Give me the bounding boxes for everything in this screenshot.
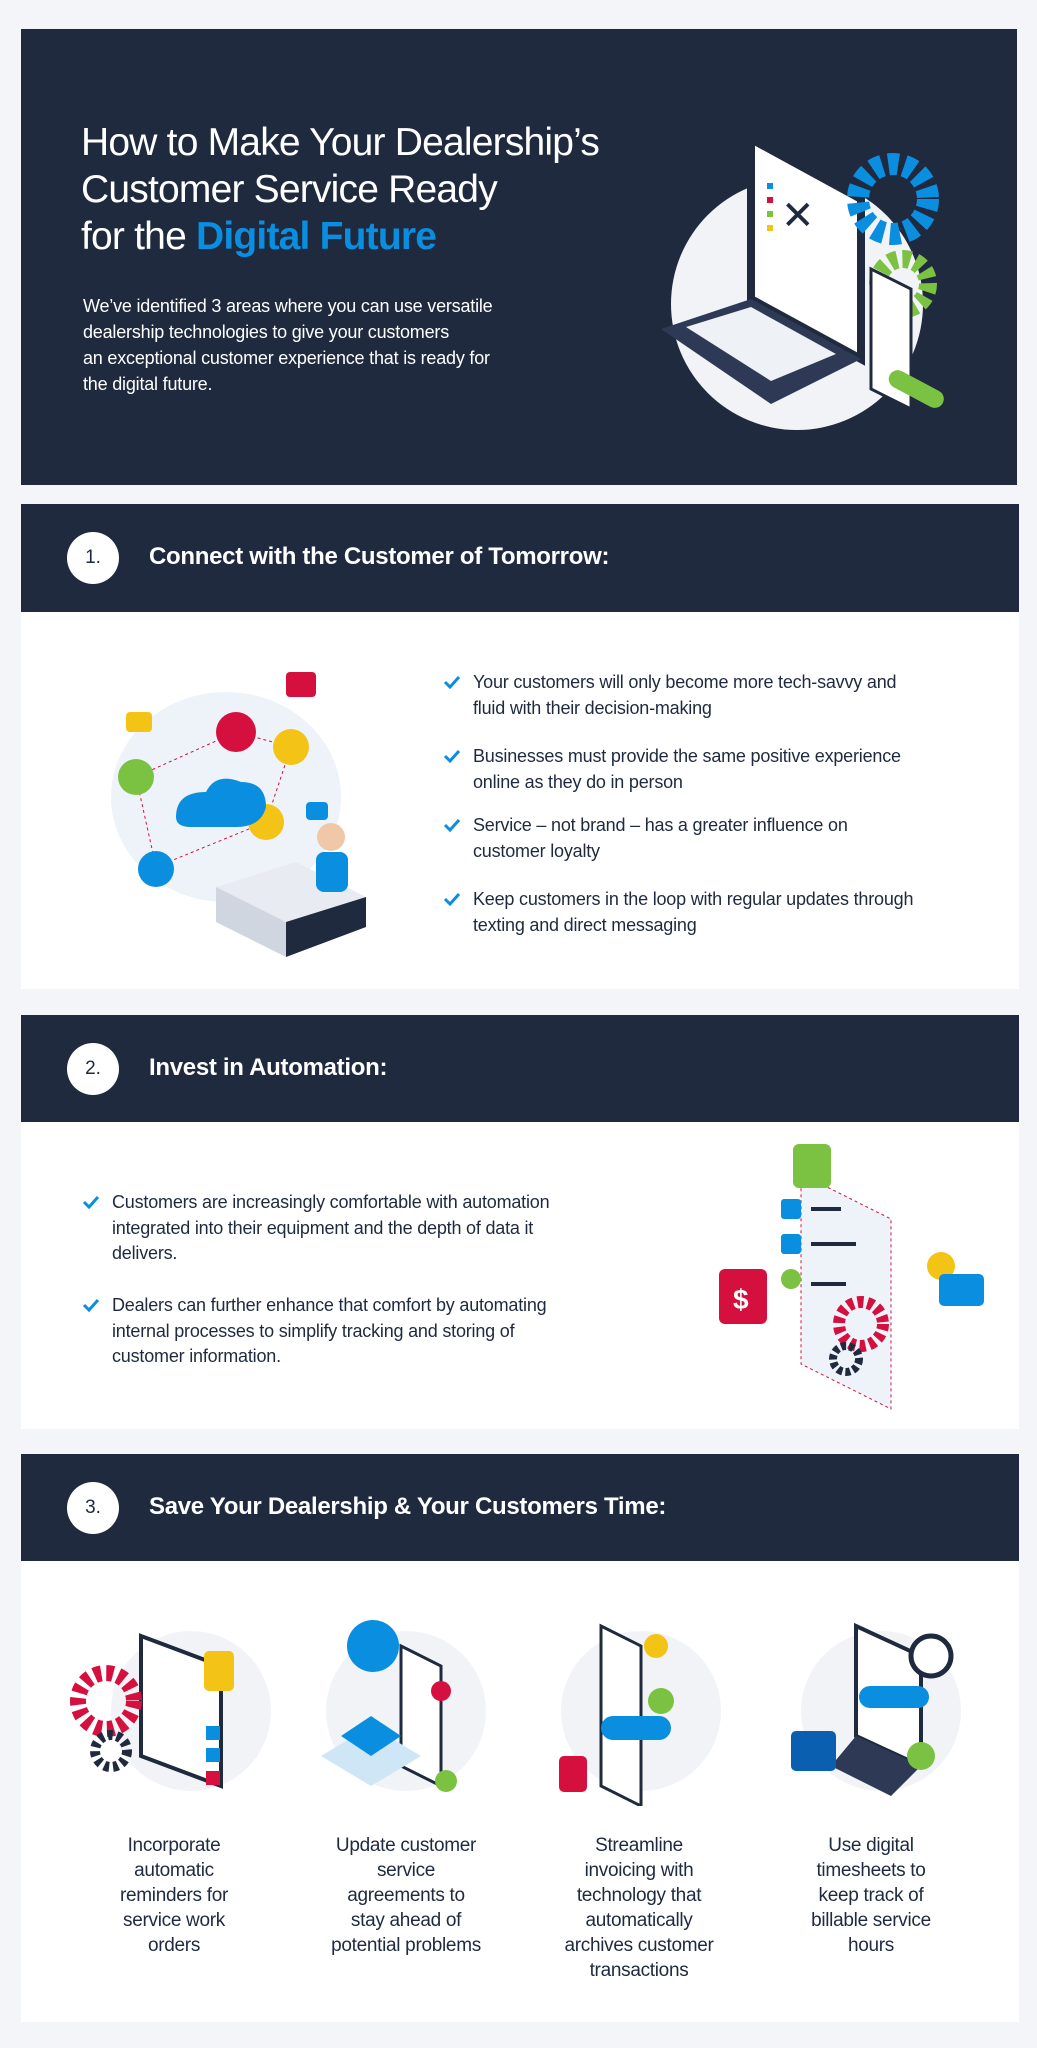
caption 3: [564, 1835, 714, 1981]
bullet 2: online as they do in person: [473, 772, 683, 792]
caption 2: Update customer: [336, 1835, 476, 1856]
caption 2: [331, 1835, 481, 1956]
caption 4: Use digital: [828, 1835, 914, 1856]
caption 3: technology that: [577, 1885, 701, 1906]
illustration: laptop with gears: [662, 146, 944, 430]
icon: reminders: [70, 1631, 271, 1791]
caption 1: Incorporate: [128, 1835, 220, 1856]
caption 3: archives customer: [564, 1935, 714, 1956]
bullet list: [83, 1192, 549, 1366]
panel: section 3 content: [21, 1561, 1019, 2022]
caption 2: potential problems: [331, 1935, 481, 1956]
bullet 1: [83, 1192, 549, 1263]
bullet 4: texting and direct messaging: [473, 914, 697, 934]
bullet 1: delivers.: [112, 1243, 177, 1263]
number badge 2: 2.: [85, 1058, 101, 1079]
bullet list: [444, 672, 913, 935]
illustration: laptop with gears: ✕: [781, 193, 815, 239]
bullet 1: Customers are increasingly comfortable with automation: [112, 1192, 549, 1212]
bullet 4: Keep customers in the loop with regular updates through: [473, 889, 913, 909]
bullet 2: Dealers can further enhance that comfort by automating: [112, 1295, 546, 1315]
caption 3: invoicing with: [585, 1860, 693, 1881]
intro text: dealership technologies to give your customers: [83, 322, 449, 342]
bullet 3: customer loyalty: [473, 840, 600, 860]
title: for the Digital Future: [81, 215, 436, 258]
number badge 2: [67, 1043, 119, 1095]
illustration: automation checklist: [719, 1144, 984, 1410]
number badge 3: 3.: [85, 1497, 101, 1518]
icon: invoicing: [559, 1624, 721, 1806]
section 3 header: [21, 1454, 1019, 1561]
bullet 2: customer information.: [112, 1346, 281, 1366]
icon: timesheets: [791, 1622, 961, 1796]
number badge 3: [67, 1482, 119, 1534]
illustration: automation checklist: $: [733, 1284, 749, 1315]
caption 3: automatically: [586, 1910, 692, 1931]
bullet 3: Service – not brand – has a greater influence on: [473, 815, 848, 835]
caption 2: service: [377, 1860, 435, 1881]
caption 2: stay ahead of: [351, 1910, 461, 1931]
section 3 heading: Save Your Dealership & Your Customers Time:: [149, 1493, 666, 1520]
caption 3: transactions: [590, 1960, 688, 1981]
bullet 1: integrated into their equipment and the depth of data it: [112, 1218, 533, 1238]
intro text: the digital future.: [83, 374, 212, 394]
intro text: We’ve identified 3 areas where you can use versatile: [83, 296, 492, 316]
panel: section 1 content: [21, 612, 1019, 989]
caption 4: keep track of: [819, 1885, 923, 1906]
caption 4: timesheets to: [816, 1860, 926, 1881]
section 1 header: [21, 504, 1019, 612]
bullet 1: fluid with their decision-making: [473, 698, 712, 718]
number badge 1: 1.: [85, 547, 101, 568]
panel: section 2 content: [21, 1122, 1019, 1429]
caption 4: [811, 1835, 931, 1956]
caption 1: orders: [148, 1935, 200, 1956]
title: Customer Service Ready: [81, 168, 497, 211]
number badge 1: [67, 532, 119, 584]
caption 1: service work: [123, 1910, 225, 1931]
icon: agreements: [321, 1620, 486, 1792]
caption 1: [120, 1835, 228, 1956]
illustration: connected customers: [111, 672, 366, 957]
caption 4: hours: [848, 1935, 894, 1956]
intro text: an exceptional customer experience that is ready for: [83, 348, 490, 368]
bullet 1: [444, 672, 896, 718]
caption 1: reminders for: [120, 1885, 228, 1906]
intro text: [83, 296, 492, 394]
header panel: [21, 29, 1017, 485]
bullet 2: [83, 1295, 546, 1366]
section 2 header: [21, 1015, 1019, 1122]
section 2 heading: Invest in Automation:: [149, 1054, 387, 1081]
caption 3: Streamline: [595, 1835, 683, 1856]
caption 4: billable service: [811, 1910, 931, 1931]
caption 1: automatic: [134, 1860, 214, 1881]
bullet 1: Your customers will only become more tech-savvy and: [473, 672, 896, 692]
bullet 2: internal processes to simplify tracking and storing of: [112, 1320, 514, 1340]
bullet 2: Businesses must provide the same positive experience: [473, 746, 901, 766]
title: How to Make Your Dealership’s: [81, 121, 599, 164]
bullet 2: [444, 746, 901, 792]
section 1 heading: Connect with the Customer of Tomorrow:: [149, 543, 609, 570]
bullet 3: [444, 815, 848, 861]
title: [81, 121, 599, 258]
caption 2: agreements to: [347, 1885, 465, 1906]
bullet 4: [444, 889, 913, 935]
